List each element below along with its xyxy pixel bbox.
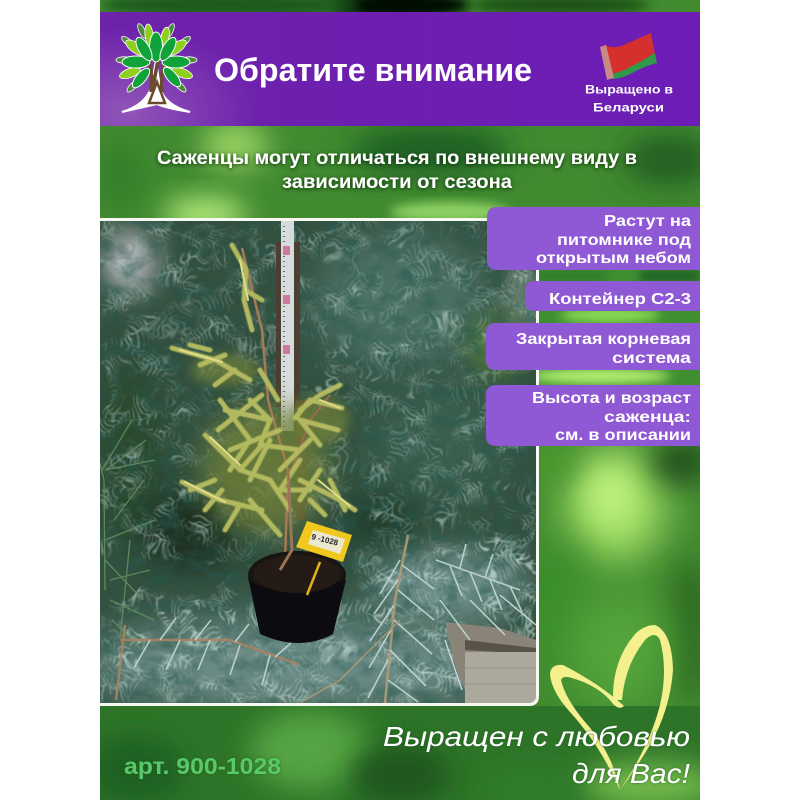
tag: open air nursery: [487, 207, 700, 270]
tagline: [383, 721, 690, 789]
tag: closed root: Закрытая корневая: [516, 331, 691, 348]
fir needle texture: [100, 221, 536, 703]
yellow plant label: 9 -1028: [311, 532, 340, 548]
panel: plant photo illustration: [80, 218, 539, 713]
ruler: [281, 221, 294, 431]
icon: yellow heart: [550, 625, 673, 790]
subheading: Саженцы могут отличаться по внешнему виду в: [157, 148, 637, 169]
dark pine on left: [94, 420, 155, 650]
yellow plant label: [296, 521, 352, 595]
wooden crate: [440, 595, 536, 703]
title: Обратите внимание: [214, 52, 532, 88]
tagline: для Вас!: [572, 758, 690, 789]
tag: height and age: см. в описании: [555, 427, 691, 444]
infographic canvas: [100, 0, 700, 800]
header band: [100, 12, 700, 126]
tag: container: [525, 281, 700, 311]
tag: open air nursery: открытым небом: [536, 250, 691, 267]
plant pot: [248, 470, 346, 643]
icon: Belarus flag: [600, 33, 657, 80]
article number: арт. 900-1028: [124, 753, 281, 779]
tag: closed root: [486, 323, 700, 370]
feature tags: [486, 207, 700, 446]
tagline: Выращен с любовью: [383, 721, 690, 752]
tag: height and age: саженца:: [604, 409, 691, 426]
icon: tree logo: [116, 22, 197, 112]
tag: height and age: [486, 385, 700, 446]
tag: closed root: система: [612, 350, 691, 367]
subheading: [157, 148, 637, 193]
tag: height and age: Высота и возраст: [532, 390, 691, 407]
origin label: [585, 82, 673, 114]
tag: open air nursery: Растут на: [604, 213, 691, 230]
origin label: Выращено в: [585, 82, 673, 96]
green bokeh background: [85, 0, 720, 800]
measuring stick post: [276, 242, 300, 407]
subheading: зависимости от сезона: [282, 172, 512, 193]
tag: container: Контейнер С2-3: [549, 291, 691, 308]
fir branches: [116, 535, 522, 703]
origin label: Беларуси: [593, 100, 664, 114]
thuja seedling: [172, 245, 355, 560]
tag: open air nursery: питомнике под: [557, 232, 691, 249]
